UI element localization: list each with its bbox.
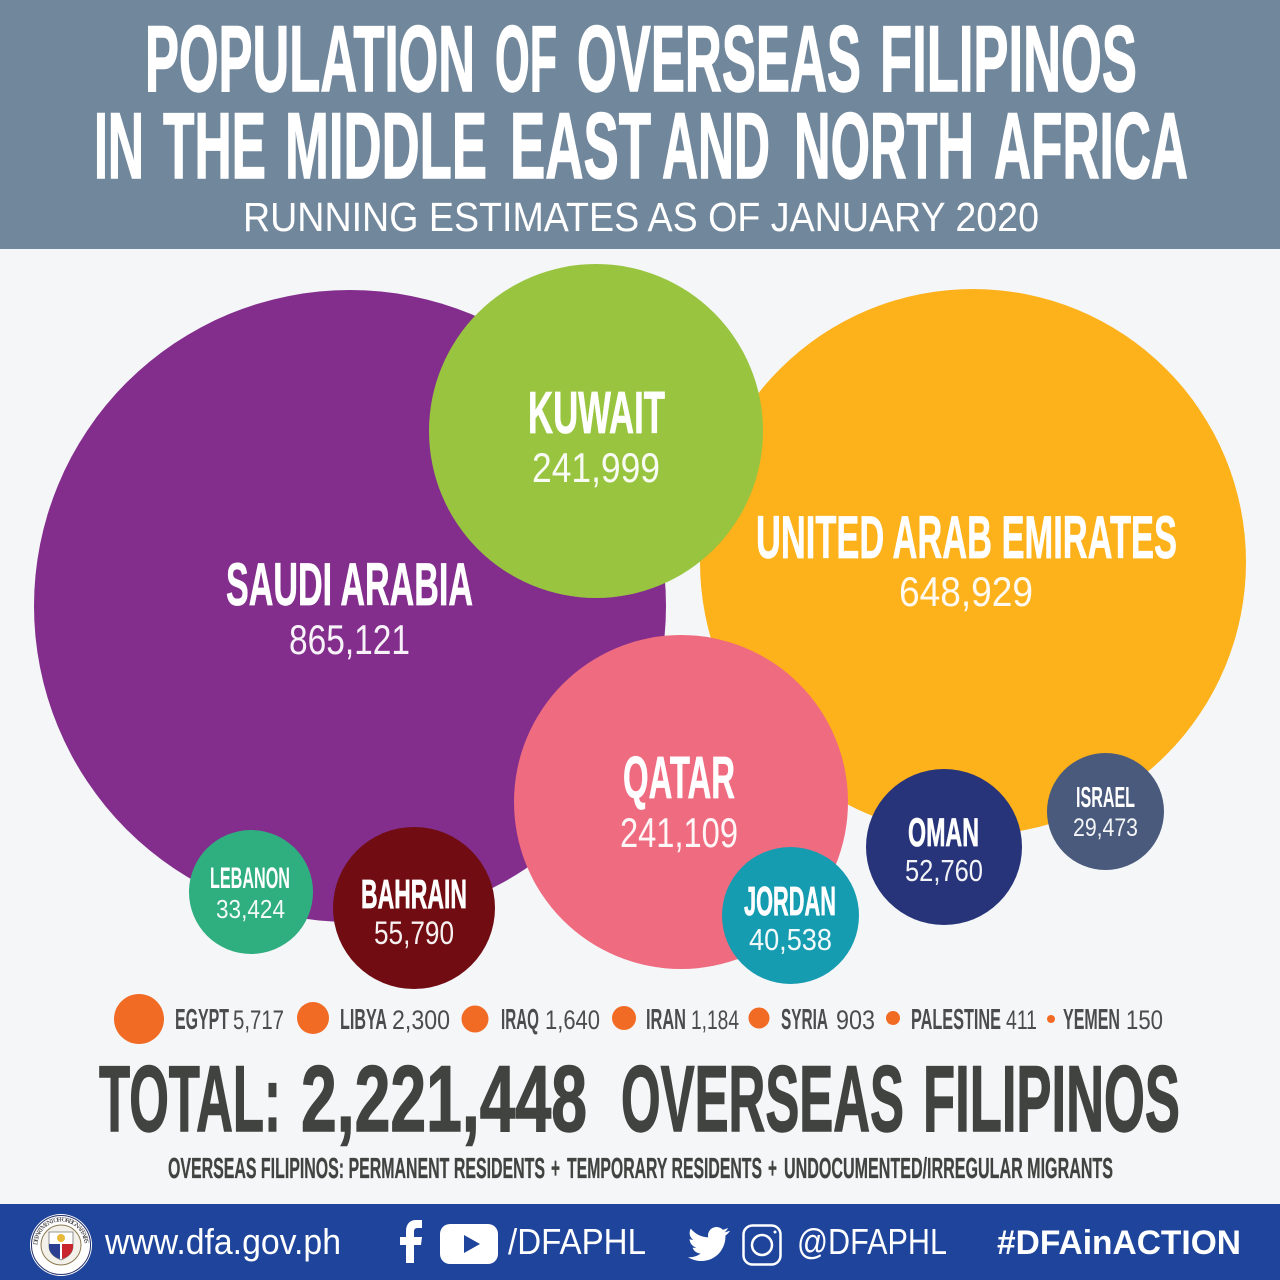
item: Iran: 1,184 (691, 1005, 739, 1035)
definition note: + (551, 1153, 560, 1185)
item: Iraq: IRAQ (501, 1004, 539, 1036)
icon: twitter (688, 1227, 730, 1261)
header banner (0, 0, 1280, 249)
title: MIDDLE (285, 93, 487, 198)
bubble: Israel: 29,473 (1073, 814, 1138, 842)
icon: instagram (744, 1226, 780, 1264)
bubble: Kuwait (429, 264, 763, 598)
item: Yemen: YEMEN (1063, 1004, 1120, 1036)
item: Egypt (114, 994, 284, 1044)
icon: youtube (440, 1224, 498, 1264)
item: Syria: SYRIA (781, 1004, 828, 1036)
title: OVERSEAS (577, 6, 861, 111)
icon: DFA seal (30, 1214, 92, 1276)
bubble: Qatar (514, 635, 848, 969)
title: AND (662, 93, 770, 198)
footer bar (0, 1204, 1280, 1280)
bubble: Oman (866, 769, 1022, 925)
item: Palestine: 411 (1006, 1005, 1037, 1035)
bubble: Jordan (722, 847, 859, 984)
definition note: TEMPORARY RESIDENTS (567, 1153, 762, 1185)
item: Syria: 903 (836, 1005, 875, 1035)
bubble: Israel (1047, 753, 1164, 870)
bubble: Qatar: QATAR (623, 745, 735, 811)
total line: TOTAL: (99, 1046, 281, 1151)
title: EAST (510, 93, 651, 198)
title (94, 6, 1188, 198)
bubble: Jordan: 40,538 (749, 922, 832, 957)
hashtag: #DFAinACTION (997, 1224, 1241, 1262)
item: Iraq (462, 1004, 600, 1036)
definition note: OVERSEAS FILIPINOS: PERMANENT RESIDENTS (168, 1153, 545, 1185)
facebook and youtube handle: /DFAPHL (508, 1221, 646, 1262)
bubble: Kuwait: 241,999 (532, 444, 660, 491)
bubble: Saudi Arabia: SAUDI ARABIA (226, 551, 473, 618)
bubble: Lebanon (189, 830, 313, 954)
item: Egypt: 5,717 (233, 1005, 284, 1035)
item: Egypt: EGYPT (175, 1004, 229, 1036)
bubble: Saudi Arabia: 865,121 (289, 616, 410, 663)
item: Palestine: PALESTINE (911, 1004, 1001, 1036)
title: IN (94, 93, 144, 198)
bubble: Lebanon: 33,424 (216, 894, 285, 924)
bubble: Jordan: JORDAN (744, 878, 836, 924)
definition note: + (768, 1153, 777, 1185)
bubble: Bahrain: 55,790 (374, 915, 454, 951)
bubble: Bahrain (333, 827, 495, 989)
item: Libya (297, 1002, 450, 1036)
item: Iran: IRAN (646, 1004, 686, 1036)
total line (99, 1046, 1180, 1151)
title: NORTH (794, 93, 974, 198)
bubble: United Arab Emirates (700, 289, 1246, 835)
item: Libya: LIBYA (340, 1004, 387, 1036)
bubble: Kuwait: KUWAIT (528, 380, 665, 446)
bubble: Oman: OMAN (908, 811, 979, 855)
bubble: Bahrain: BAHRAIN (361, 871, 467, 917)
item: Palestine (886, 1004, 1037, 1036)
bubble: Oman: 52,760 (905, 853, 983, 888)
title: OF (495, 6, 557, 111)
website: www.dfa.gov.ph (104, 1221, 341, 1262)
small countries legend (114, 994, 1163, 1044)
item: Iraq: 1,640 (545, 1005, 600, 1035)
item: Iran (612, 1004, 739, 1036)
item: Libya: 2,300 (392, 1005, 450, 1035)
bubble: Qatar: 241,109 (620, 809, 738, 856)
bubble: United Arab Emirates: 648,929 (899, 568, 1033, 615)
bubble: Saudi Arabia (34, 290, 666, 922)
twitter and instagram handle: @DFAPHL (797, 1221, 947, 1262)
bubble: Israel: ISRAEL (1076, 782, 1135, 814)
icon: DFA seal: DEPARTMENT OF FOREIGN AFFAIRS (33, 1217, 89, 1245)
icon: facebook (400, 1220, 422, 1263)
title: THE (163, 93, 266, 198)
bubble: Lebanon: LEBANON (210, 862, 290, 895)
total line: OVERSEAS (621, 1046, 904, 1151)
title: POPULATION (145, 6, 475, 111)
subtitle: RUNNING ESTIMATES AS OF JANUARY 2020 (243, 194, 1039, 240)
total line: 2,221,448 (301, 1046, 587, 1151)
item: Yemen: 150 (1126, 1005, 1163, 1035)
